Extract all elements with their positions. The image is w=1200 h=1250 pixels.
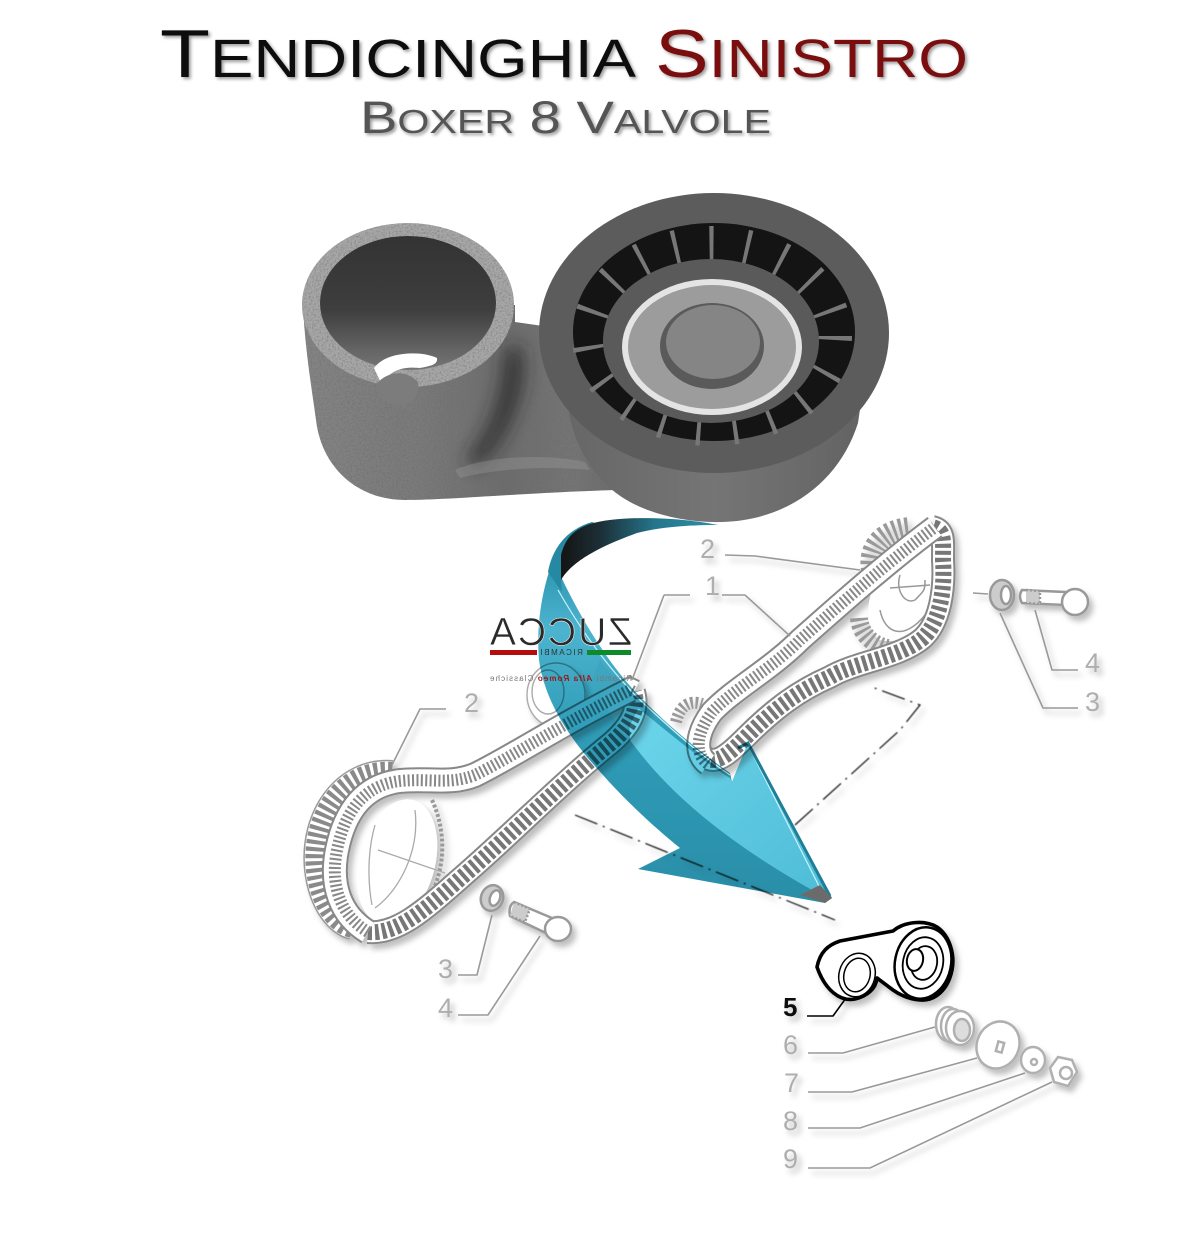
part 5 outline [817, 922, 953, 1000]
cylinder hole [320, 236, 496, 370]
arrow tip grey [800, 885, 832, 903]
washer and bolt upper right [990, 580, 1088, 615]
title [160, 16, 968, 92]
arrow [538, 518, 832, 903]
upper pulley [859, 528, 935, 648]
callout numbers: 2 [464, 688, 479, 718]
bearing face [628, 285, 796, 409]
lower-left dotted belt [335, 690, 634, 932]
title word: Sinistro: SINISTRO [655, 16, 968, 92]
callout numbers: 4 [1085, 648, 1100, 678]
arrow ribbon outer band [548, 522, 600, 592]
arrow light facet [628, 700, 830, 900]
logo small text: RICAMBI [539, 648, 583, 657]
part 5 leader [807, 998, 846, 1016]
washer and bolt lower left [477, 882, 571, 941]
arrow dark edge [738, 743, 830, 896]
arm ridge [455, 457, 590, 478]
mirrored logo: Zucca Ricambi [489, 611, 632, 683]
callout numbers: 8 [783, 1106, 798, 1136]
callout numbers: 3 [438, 954, 453, 984]
spring 6 [936, 1007, 974, 1045]
keyhole notch [376, 373, 418, 405]
nut 9 [1050, 1057, 1077, 1086]
arrow highlight edge [558, 590, 825, 898]
logo red bar (mirrored to the left) [490, 650, 537, 655]
washer 8 [1021, 1047, 1045, 1073]
callout numbers: 2 [700, 534, 715, 564]
callout numbers [438, 534, 1100, 1174]
callout numbers: 5 [783, 992, 797, 1022]
cap base [660, 303, 764, 389]
arrow main body [538, 560, 832, 903]
slot in cylinder [374, 353, 437, 385]
subtitle: BOXER 8 V ALVOLE [360, 92, 771, 143]
center lines [575, 687, 920, 920]
lower pulley disc [344, 790, 450, 934]
casting body and arm [303, 305, 640, 500]
part 5 pulley face [888, 922, 958, 1004]
lower-left toothed belt [368, 692, 636, 932]
callout numbers: 9 [783, 1144, 798, 1174]
callout numbers: 3 [1085, 687, 1100, 717]
upper pulley centre [880, 575, 930, 631]
small parts 6 to 9 [936, 1007, 1077, 1086]
callout numbers: 4 [438, 993, 453, 1023]
small pulley behind right [676, 703, 702, 722]
lower pulley inner arcs [369, 810, 445, 908]
upper pulley back teeth [871, 528, 910, 570]
ribs [590, 244, 834, 428]
cylinder rim [302, 223, 514, 387]
part 5: highlighted tensioner [807, 922, 958, 1016]
logo green bar (mirrored to the right) [587, 650, 631, 655]
casting shadow [469, 345, 523, 467]
title word: Tendicinghia: TENDICINGHIA [160, 16, 636, 92]
pulley face [539, 193, 889, 473]
left outer teeth [315, 772, 392, 928]
upper-right toothed belt [700, 527, 943, 760]
logo wordmark: ZUCCA [490, 611, 632, 654]
ribbed black ring [573, 223, 855, 441]
callout numbers: 6 [783, 1030, 798, 1060]
small pulley behind left [527, 663, 585, 727]
cap top [666, 305, 760, 379]
washer 7 [969, 1014, 1027, 1076]
bearing outer ring [622, 279, 802, 415]
pulley side [560, 340, 870, 522]
upper-right dotted belt [699, 527, 935, 764]
hub ring [603, 259, 819, 423]
product photo: belt tensioner [302, 193, 889, 522]
leader lines [392, 555, 1078, 1168]
callout numbers: 7 [784, 1068, 799, 1098]
exploded line drawing [315, 527, 1100, 1174]
logo tagline: Ricambi Alfa Romeo Classiche [489, 674, 632, 683]
upper pulley lower teeth [859, 618, 888, 648]
callout numbers: 1 [705, 571, 720, 601]
lower pulley scalloped edge [425, 800, 442, 905]
upper pulley disc [868, 540, 935, 641]
part 5 hole [834, 949, 880, 1001]
arrow ribbon underside [561, 518, 718, 580]
